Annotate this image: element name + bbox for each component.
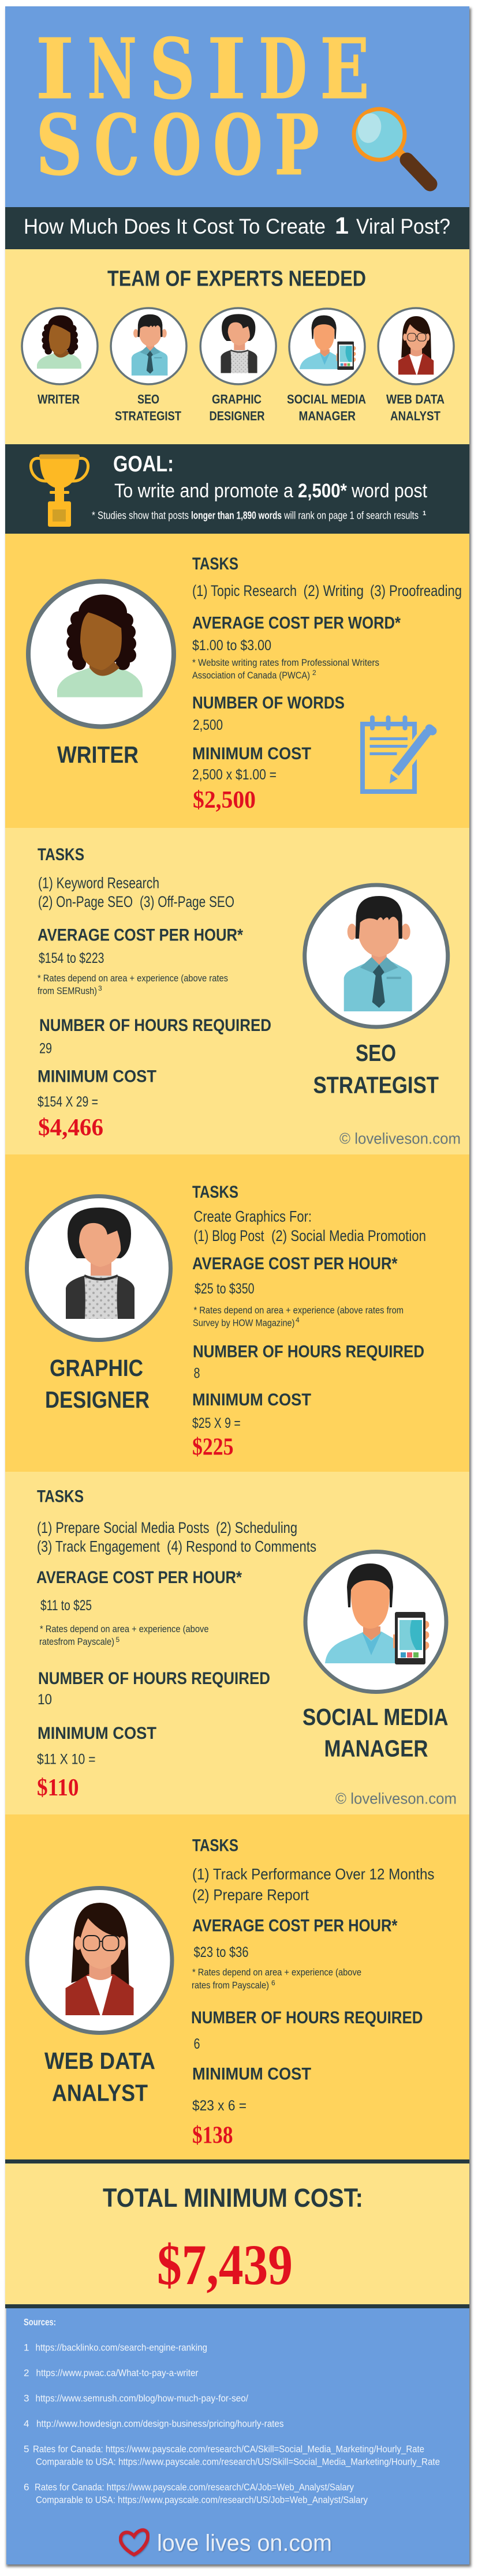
average cost per hour	[36, 1568, 242, 1647]
team member: SEO strategist: STRATEGIST	[115, 408, 181, 423]
number of hours: NUMBER OF HOURS REQUIRED	[191, 2008, 423, 2027]
panel: total minimum cost	[5, 2159, 469, 2308]
credit: © loveliveson.com	[335, 1790, 457, 1807]
minimum cost: $25 X 9 =	[192, 1415, 241, 1431]
source list: http://www.howdesign.com/design-business/pricing/hourly-rates	[36, 2418, 284, 2429]
average cost per word: * Website writing rates from Professional Writers	[192, 657, 379, 668]
number of hours: 29	[39, 1041, 52, 1057]
average cost per hour: $154 to $223	[39, 950, 104, 966]
source list: Rates for Canada: https://www.payscale.com/research/CA/Skill=Social_Media_Marketing/Hourly_Rate	[33, 2444, 424, 2454]
heading: team of experts needed: TEAM OF EXPERTS NEEDED	[107, 267, 366, 291]
source list: 6	[24, 2482, 29, 2492]
title: INSIDE SCOOP: S	[150, 20, 195, 118]
number of hours	[39, 1016, 271, 1057]
tasks	[192, 1836, 434, 1904]
title: INSIDE SCOOP: I	[207, 20, 247, 118]
source list: 5	[24, 2444, 29, 2454]
role name: web data analyst: ANALYST	[52, 2079, 148, 2106]
tasks: (1) Topic Research	[192, 582, 297, 599]
minimum cost: MINIMUM COST	[192, 2064, 311, 2084]
source list: Comparable to USA: https://www.payscale.com/research/US/Skill=Social_Media_Marketing/Hourly_Rate	[36, 2457, 440, 2467]
title: INSIDE SCOOP: E	[320, 20, 369, 118]
source list: https://www.semrush.com/blog/how-much-pay-for-seo/	[36, 2393, 248, 2403]
average cost per hour: $23 to $36	[194, 1944, 248, 1960]
average cost per hour: 6	[271, 1979, 275, 1987]
minimum cost: 2,500 x $1.00 =	[192, 767, 277, 783]
tasks: (1) Blog Post	[194, 1227, 264, 1244]
goal footnote: longer than 1,890 words	[191, 510, 282, 522]
title: INSIDE SCOOP	[35, 20, 369, 194]
tasks	[192, 554, 462, 599]
tasks: (2) Social Media Promotion	[271, 1227, 426, 1244]
role name: writer: WRITER	[57, 741, 139, 768]
average cost per hour: from SEMRush)	[38, 985, 97, 996]
number of hours: NUMBER OF HOURS REQUIRED	[38, 1669, 270, 1688]
tasks: TASKS	[192, 554, 238, 573]
team member: graphic designer: DESIGNER	[209, 408, 265, 423]
average cost per hour	[38, 925, 243, 996]
panel: sources	[6, 2308, 469, 2564]
title: INSIDE SCOOP: N	[87, 20, 137, 118]
goal footnote	[92, 510, 426, 522]
team member: graphic designer: GRAPHIC	[212, 392, 262, 406]
subtitle bar	[5, 207, 469, 249]
minimum cost: MINIMUM COST	[192, 1390, 311, 1409]
number of words: 2,500	[193, 717, 223, 733]
minimum cost: $23 x 6 =	[192, 2098, 247, 2114]
tasks: (1) Track Performance Over 12 Months	[192, 1866, 434, 1883]
subtitle bar: How Much Does It Cost To Create	[24, 215, 326, 238]
source list: https://www.pwac.ca/What-to-pay-a-writer	[36, 2368, 199, 2378]
icon: notepad and pencil	[363, 718, 432, 792]
source list: 4	[24, 2418, 29, 2429]
subtitle bar: 1	[335, 212, 349, 239]
number of hours: 8	[194, 1365, 200, 1381]
panel: graphic designer	[5, 1154, 469, 1472]
total amount: $7,439	[157, 2233, 293, 2297]
role name: web data analyst: WEB DATA	[44, 2048, 155, 2074]
minimum cost: $225	[192, 1434, 233, 1461]
average cost per hour: 5	[115, 1636, 120, 1644]
minimum cost: MINIMUM COST	[192, 744, 311, 763]
role name: web data analyst	[44, 2048, 155, 2106]
tasks	[38, 845, 234, 910]
panel: writer	[5, 534, 469, 828]
sources heading: Sources:	[24, 2317, 56, 2327]
average cost per hour: 4	[296, 1316, 300, 1324]
minimum cost: $11 X 10 =	[37, 1752, 96, 1768]
credit: © loveliveson.com	[339, 1130, 461, 1147]
tasks: (2) Scheduling	[216, 1519, 297, 1536]
role name: social media manager: MANAGER	[324, 1735, 428, 1762]
number of hours: NUMBER OF HOURS REQUIRED	[193, 1342, 424, 1362]
goal footnote: will rank on page 1 of search results	[283, 510, 419, 522]
tasks: (4) Respond to Comments	[167, 1538, 316, 1555]
average cost per hour: * Rates depend on area + experience (above	[192, 1967, 361, 1978]
tasks: (2) Prepare Report	[192, 1887, 309, 1904]
tasks: (1) Prepare Social Media Posts	[37, 1519, 209, 1536]
tasks: (2) On-Page SEO	[38, 893, 133, 910]
average cost per hour: AVERAGE COST PER HOUR*	[36, 1568, 242, 1587]
tasks	[37, 1487, 316, 1555]
average cost per hour: AVERAGE COST PER HOUR*	[192, 1254, 398, 1273]
minimum cost: MINIMUM COST	[38, 1067, 156, 1086]
minimum cost	[38, 1067, 156, 1141]
source list: Rates for Canada: https://www.payscale.com/research/CA/Job=Web_Analyst/Salary	[35, 2482, 354, 2492]
goal statement: word post	[351, 480, 427, 502]
number of hours	[191, 2008, 423, 2052]
average cost per word	[192, 614, 401, 681]
number of hours	[38, 1669, 270, 1708]
team member: web data analyst: ANALYST	[390, 408, 440, 423]
average cost per hour: * Rates depend on area + experience (above rates	[38, 973, 228, 984]
goal statement: To write and promote a	[114, 480, 293, 502]
average cost per hour	[192, 1254, 404, 1328]
team member: social media manager	[287, 309, 366, 423]
goal statement: 2,500*	[298, 480, 348, 502]
goal statement	[114, 480, 427, 502]
minimum cost	[192, 744, 311, 813]
source list: 2	[24, 2368, 29, 2378]
portrait: social media manager	[305, 1552, 446, 1692]
tasks: TASKS	[192, 1183, 238, 1202]
source list: 3	[24, 2393, 29, 2403]
average cost per hour	[192, 1917, 398, 1990]
icon: magnifying glass	[354, 109, 430, 184]
portrait: SEO strategist	[305, 885, 448, 1027]
panel: web data analyst	[5, 1814, 469, 2159]
team member: social media manager: SOCIAL MEDIA	[287, 392, 366, 406]
average cost per hour: rates from Payscale)	[192, 1980, 269, 1990]
average cost per hour: $11 to $25	[40, 1598, 92, 1614]
minimum cost: $4,466	[38, 1115, 103, 1141]
minimum cost: $154 X 29 =	[38, 1094, 98, 1110]
title: INSIDE SCOOP: O	[152, 96, 201, 194]
subtitle bar: Viral Post?	[356, 215, 450, 238]
team member: social media manager: MANAGER	[299, 408, 356, 423]
portrait: web data analyst	[27, 1888, 172, 2033]
number of hours: NUMBER OF HOURS REQUIRED	[39, 1016, 271, 1035]
role name: social media manager: SOCIAL MEDIA	[303, 1704, 448, 1730]
number of words: NUMBER OF WORDS	[192, 693, 345, 713]
panel: title header	[5, 6, 469, 207]
average cost per word: 2	[312, 669, 316, 677]
role name: SEO strategist: STRATEGIST	[313, 1072, 439, 1098]
goal heading: GOAL:	[113, 452, 174, 477]
average cost per hour: $25 to $350	[195, 1281, 254, 1297]
minimum cost	[192, 1390, 311, 1461]
role name: graphic designer: DESIGNER	[45, 1386, 150, 1413]
number of hours: 10	[38, 1692, 52, 1708]
tasks: (2) Writing	[304, 582, 364, 599]
role name: SEO strategist	[313, 1040, 439, 1098]
average cost per hour: AVERAGE COST PER HOUR*	[192, 1917, 398, 1935]
tasks: TASKS	[38, 845, 84, 864]
panel: SEO strategist	[5, 828, 469, 1154]
title: INSIDE SCOOP: I	[35, 20, 74, 118]
team member: graphic designer	[200, 308, 276, 423]
team member: SEO strategist	[111, 308, 186, 423]
average cost per word: AVERAGE COST PER WORD*	[192, 614, 401, 632]
portrait: writer	[28, 582, 174, 727]
average cost per hour: 3	[98, 984, 102, 992]
goal footnote: 1	[423, 510, 426, 517]
panel: team of experts	[5, 249, 469, 444]
average cost per word: $1.00 to $3.00	[192, 638, 271, 654]
tasks: (1) Keyword Research	[38, 875, 159, 892]
goal footnote: * Studies show that posts	[92, 510, 189, 522]
title: INSIDE SCOOP: P	[274, 96, 319, 194]
icon: trophy	[31, 455, 88, 527]
panel: goal	[5, 444, 469, 534]
source list: https://backlinko.com/search-engine-ranking	[36, 2342, 207, 2353]
minimum cost: $2,500	[193, 787, 256, 813]
role name: graphic designer: GRAPHIC	[50, 1355, 143, 1381]
minimum cost: MINIMUM COST	[38, 1724, 156, 1743]
logo: love lives on: love lives on.com	[157, 2529, 332, 2556]
number of hours	[193, 1342, 424, 1381]
role name: social media manager	[303, 1704, 448, 1762]
title: INSIDE SCOOP: C	[94, 96, 140, 194]
title: INSIDE SCOOP: S	[36, 96, 83, 194]
role name: graphic designer	[45, 1355, 150, 1413]
minimum cost	[37, 1724, 156, 1801]
portrait: graphic designer	[27, 1197, 171, 1340]
average cost per hour: Survey by HOW Magazine)	[193, 1318, 294, 1328]
average cost per hour: ratesfrom Payscale)	[39, 1636, 114, 1647]
tasks: Create Graphics For:	[194, 1208, 312, 1225]
average cost per hour: AVERAGE COST PER HOUR*	[38, 925, 243, 945]
average cost per word: Association of Canada (PWCA)	[192, 670, 310, 681]
number of hours: 6	[194, 2036, 200, 2052]
title: INSIDE SCOOP: O	[213, 96, 263, 194]
role name: SEO strategist: SEO	[356, 1040, 396, 1066]
team member: web data analyst: WEB DATA	[386, 392, 445, 406]
source list: 1	[24, 2342, 29, 2353]
tasks: (3) Track Engagement	[37, 1538, 160, 1555]
average cost per hour: * Rates depend on area + experience (above	[40, 1623, 209, 1634]
source list: Comparable to USA: https://www.payscale.com/research/US/Job=Web_Analyst/Salary	[36, 2495, 368, 2505]
team member: writer: WRITER	[38, 392, 80, 406]
panel: social media manager	[5, 1472, 469, 1814]
average cost per hour: * Rates depend on area + experience (above rates from	[194, 1305, 404, 1315]
minimum cost: $110	[37, 1775, 79, 1801]
tasks: (3) Off-Page SEO	[140, 893, 234, 910]
team member: SEO strategist: SEO	[137, 392, 159, 406]
tasks: TASKS	[37, 1487, 84, 1506]
source list	[24, 2342, 440, 2505]
tasks: TASKS	[192, 1836, 238, 1855]
title: INSIDE SCOOP: D	[259, 20, 307, 118]
minimum cost	[192, 2064, 311, 2148]
team member: writer	[22, 308, 98, 406]
team member: web data analyst	[378, 308, 454, 423]
minimum cost: $138	[192, 2122, 233, 2148]
total heading: TOTAL MINIMUM COST:	[103, 2183, 363, 2213]
tasks	[192, 1183, 426, 1244]
number of words	[192, 693, 345, 733]
